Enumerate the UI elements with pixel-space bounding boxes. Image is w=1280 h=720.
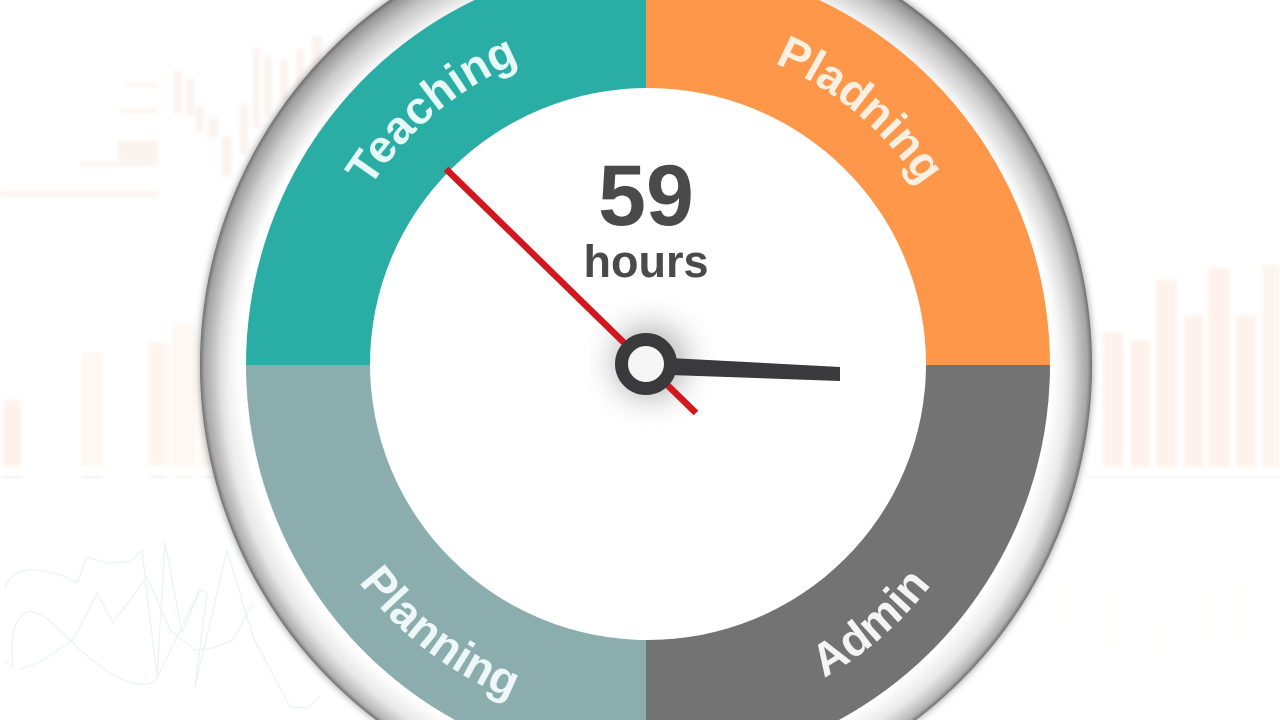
background line chart: lower left (5, 542, 320, 708)
background bars: right (1103, 265, 1280, 467)
label: Planning: Planning (360, 564, 518, 704)
sector: Admin (646, 365, 1050, 720)
background chart: upper left (0, 36, 322, 197)
label: Admin: Admin (818, 574, 930, 678)
background axis ticks (3, 476, 1280, 478)
black hour hand (670, 358, 840, 381)
metal ring (200, 0, 1092, 720)
label: Teaching: Teaching (344, 41, 518, 179)
red second hand (446, 169, 696, 413)
total value: 59 (598, 148, 694, 244)
ring upper shading (200, 0, 1092, 720)
background chart: lower right (1056, 580, 1248, 654)
background bars: left (3, 325, 220, 466)
inner dial (370, 88, 926, 640)
label: Pladning: Pladning (777, 36, 940, 186)
outer shadow (199, 0, 1093, 720)
hub shadow (614, 326, 686, 398)
sector: Pladning (646, 0, 1050, 365)
centre hub (622, 340, 670, 388)
sector: Teaching (246, 0, 646, 365)
sector: Planning (246, 365, 646, 720)
clock face (195, 0, 1097, 720)
unit label: hours (583, 236, 709, 287)
